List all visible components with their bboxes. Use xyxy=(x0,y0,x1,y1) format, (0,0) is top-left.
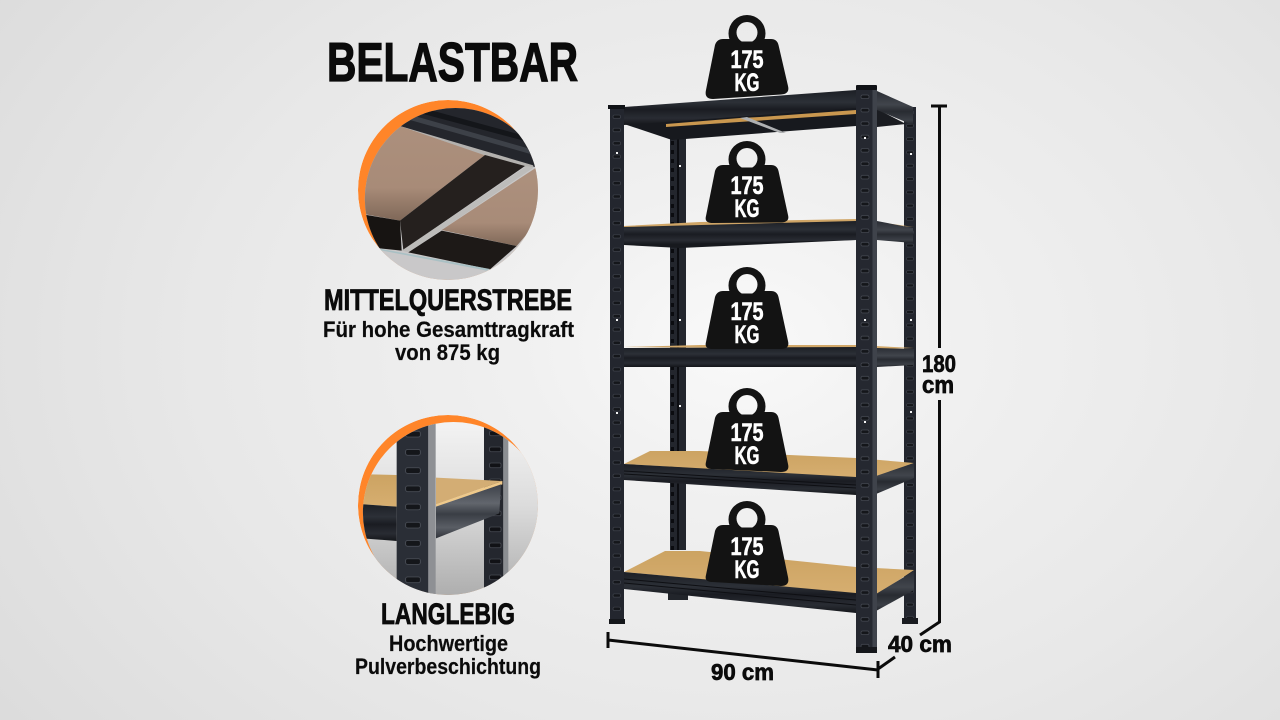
text: gesamttragkraft line 2: von 875 kg xyxy=(395,340,500,365)
weight 1: 175 xyxy=(730,46,764,74)
weight 4 xyxy=(706,388,788,472)
panel: langlebig detail circle xyxy=(358,415,538,595)
panel: mittelquerstrebe detail circle xyxy=(358,100,538,280)
weight 1 xyxy=(706,15,788,99)
weight 2: 175 xyxy=(730,172,764,200)
weight 5: KG xyxy=(734,556,760,584)
shelf 1 top xyxy=(624,90,913,140)
text: pulverbeschichtung line 1: Hochwertige xyxy=(389,631,508,656)
label: 90 cm: 90 cm xyxy=(711,659,774,685)
heading: mittelquerstrebe: MITTELQUERSTREBE xyxy=(324,284,572,317)
weight 3 xyxy=(706,267,788,349)
label: 180: 180 xyxy=(922,351,956,378)
shelving unit xyxy=(608,85,918,653)
text: gesamttragkraft line 1: Für hohe Gesamttragkraft xyxy=(323,317,575,342)
weight 4: 175 xyxy=(730,419,764,447)
shelf 3 xyxy=(624,345,914,367)
shelf 5 xyxy=(624,551,914,613)
mounting dots xyxy=(616,137,912,423)
dimension: depth xyxy=(878,657,895,669)
dimension: width xyxy=(608,632,878,678)
dimension: height xyxy=(920,106,947,635)
front left post xyxy=(608,105,625,624)
shelf 2 xyxy=(624,219,914,248)
back left post xyxy=(670,130,686,550)
label: cm: cm xyxy=(922,372,954,399)
weight 4: KG xyxy=(734,442,760,470)
shelf 4 xyxy=(624,451,914,495)
weight 2 xyxy=(706,141,788,223)
heading: langlebig: LANGLEBIG xyxy=(381,598,515,631)
front right post xyxy=(856,85,877,653)
text: pulverbeschichtung line 2: Pulverbeschichtung xyxy=(355,654,541,679)
weight 5 xyxy=(706,501,788,586)
weight 1: KG xyxy=(734,69,760,97)
weight 5: 175 xyxy=(730,533,764,561)
weight 3: KG xyxy=(734,321,760,349)
back right post xyxy=(902,107,918,624)
title: BELASTBAR xyxy=(327,31,578,93)
weight 2: KG xyxy=(734,195,760,223)
weight 3: 175 xyxy=(730,298,764,326)
label: 40 cm: 40 cm xyxy=(888,631,952,657)
